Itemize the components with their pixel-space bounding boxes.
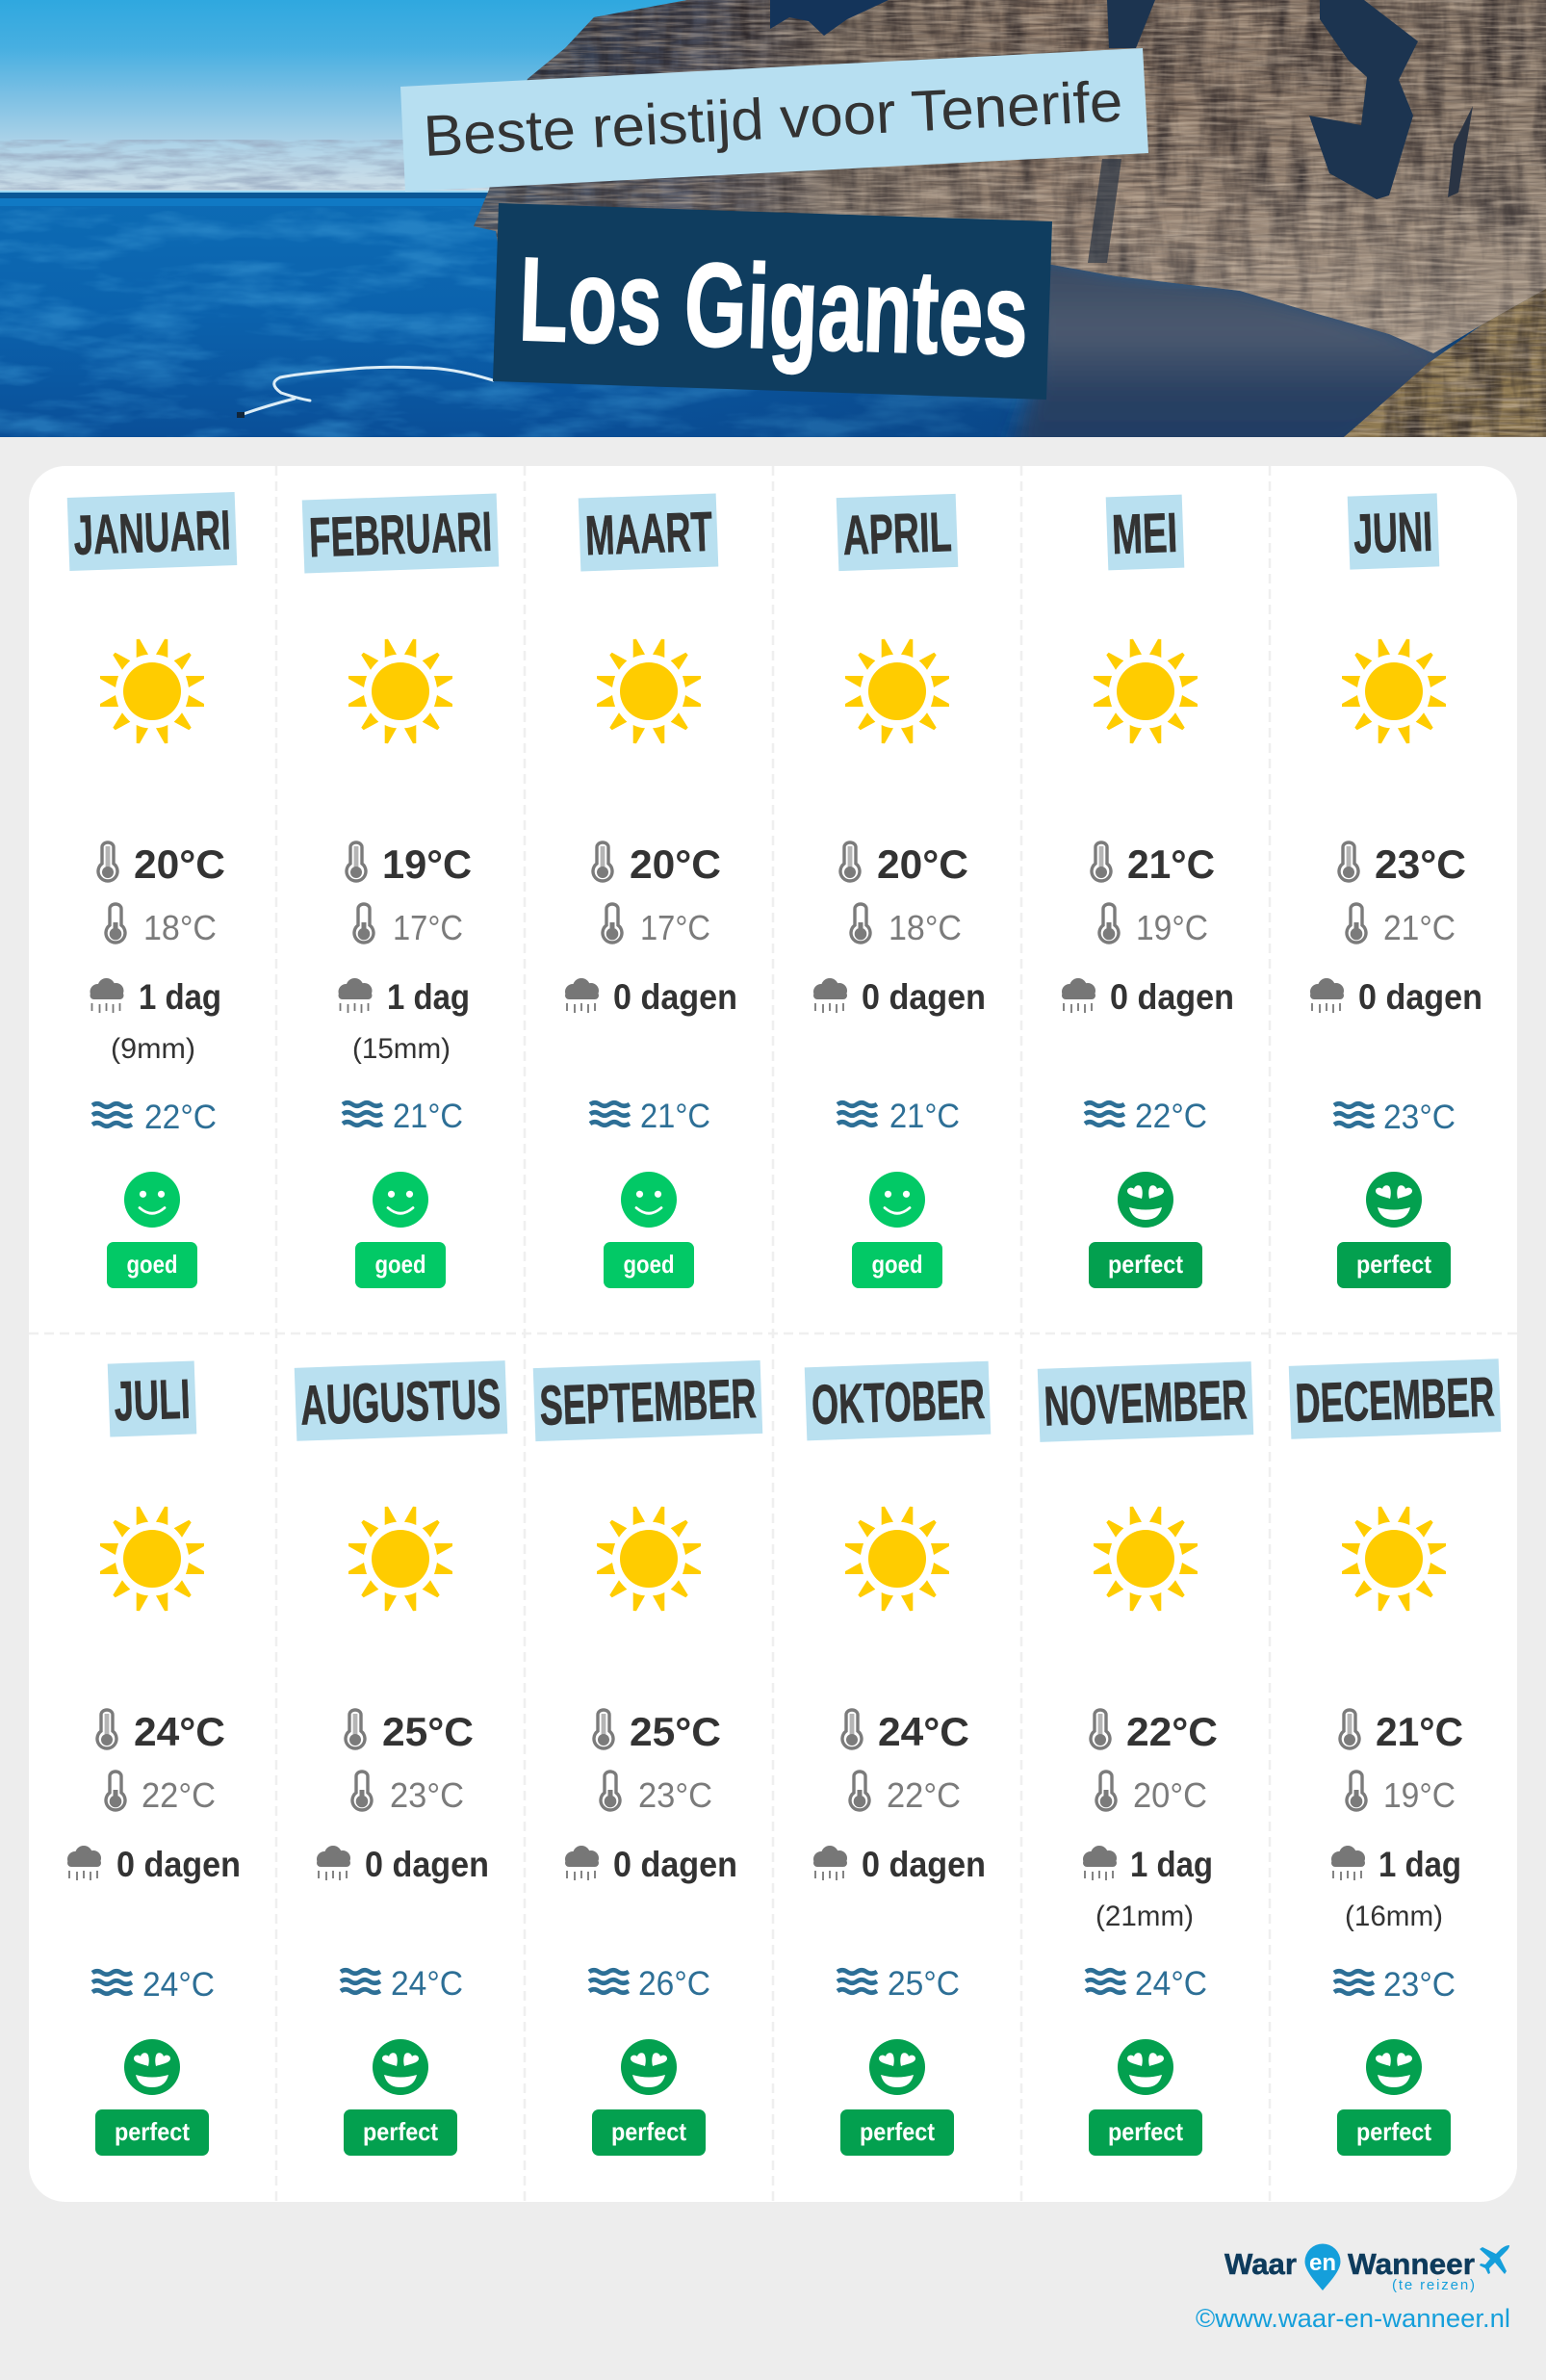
rating: perfect [1337, 2039, 1451, 2156]
month label [805, 1361, 991, 1440]
sea temperature [343, 1098, 463, 1135]
rain days [565, 1845, 737, 1884]
sea temperature: 23°C [1383, 1099, 1456, 1136]
month: januari [67, 492, 237, 1288]
min temperature [1347, 904, 1456, 947]
logo: Waar en Wanneer: Waar [1224, 2247, 1297, 2281]
min temperature: 22°C [887, 1775, 961, 1815]
min temperature [851, 904, 962, 947]
icon: location pin [1305, 2243, 1340, 2290]
max temperature: 23°C [1375, 841, 1466, 887]
title banner: Los Gigantes [493, 203, 1052, 400]
max temperature [1340, 1709, 1463, 1754]
month label [533, 1360, 762, 1441]
rain days: 1 dag [1379, 1845, 1461, 1884]
rain days [1310, 977, 1482, 1017]
rain days: 0 dagen [1358, 977, 1482, 1017]
icon: sun [100, 1507, 204, 1611]
rating: perfect [344, 2039, 457, 2156]
month: september [533, 1360, 762, 2156]
max temperature: 20°C [877, 841, 968, 887]
month label: JUNI [1353, 501, 1433, 565]
min temperature: 21°C [1383, 908, 1456, 947]
sea temperature: 25°C [888, 1965, 960, 2003]
max temperature: 20°C [630, 841, 721, 887]
title banner: Beste reistijd voor Tenerife [400, 48, 1148, 192]
min temperature: 19°C [1383, 1775, 1456, 1815]
rain days [67, 1845, 241, 1884]
month label: JULI [113, 1368, 192, 1433]
sea temperature [92, 1966, 215, 2004]
icon: sun [597, 1507, 701, 1611]
month label: FEBRUARI [308, 501, 493, 569]
copyright url: ©www.waar-en-wanneer.nl [1196, 2304, 1510, 2333]
max temperature: 20°C [134, 841, 225, 887]
month: december [1289, 1358, 1501, 2156]
rain days [90, 977, 221, 1065]
rain days [1062, 977, 1234, 1017]
rain days: 0 dagen [613, 1845, 737, 1884]
icon: airplane [1480, 2245, 1509, 2274]
min temperature [106, 904, 217, 947]
rain days: 1 dag [387, 977, 470, 1017]
icon: sun [100, 639, 204, 743]
rating: perfect: perfect [1108, 2117, 1183, 2146]
sea temperature: 24°C [391, 1965, 463, 2003]
sea temperature [1334, 1099, 1456, 1136]
panel: climate table card [29, 466, 1517, 2202]
sea temperature [1086, 1965, 1207, 2003]
min temperature [1347, 1772, 1456, 1815]
sea temperature [837, 1965, 960, 2003]
sea temperature: 21°C [393, 1098, 463, 1135]
min temperature: 17°C [640, 908, 710, 947]
rating: goed [107, 1172, 197, 1288]
month label: MAART [584, 501, 713, 567]
rain days: 0 dagen [862, 977, 986, 1017]
rain days [813, 977, 986, 1017]
rain days: 0 dagen [1110, 977, 1234, 1017]
sea temperature [341, 1965, 463, 2003]
max temperature: 24°C [134, 1709, 225, 1754]
rain days [1331, 1845, 1461, 1932]
min temperature: 18°C [889, 908, 962, 947]
rating: perfect [1089, 1172, 1202, 1288]
logo: Waar en Wanneer [1224, 2243, 1509, 2293]
sea temperature [1334, 1966, 1456, 2004]
month: juli [67, 1360, 241, 2156]
rating: goed: goed [127, 1250, 177, 1279]
rating: goed [604, 1172, 694, 1288]
max temperature: 24°C [878, 1709, 969, 1754]
rating: perfect [840, 2039, 954, 2156]
min temperature: 18°C [143, 908, 217, 947]
sea temperature: 24°C [1135, 1965, 1207, 2003]
min temperature: 17°C [393, 908, 463, 947]
header photo: cliffs of Los Gigantes and the sea [0, 0, 1546, 453]
month: juni [1310, 493, 1482, 1288]
icon: sun [348, 639, 452, 743]
max temperature: 22°C [1126, 1709, 1218, 1754]
sea temperature: 26°C [638, 1965, 710, 2003]
sea temperature [92, 1099, 217, 1136]
max temperature [1092, 841, 1215, 887]
rating: perfect: perfect [115, 2117, 190, 2146]
max temperature: 25°C [382, 1709, 474, 1754]
month: april [813, 494, 986, 1288]
rain days [339, 977, 470, 1065]
sea temperature: 22°C [1135, 1098, 1207, 1135]
rain days [1083, 1845, 1213, 1932]
min temperature [106, 1772, 216, 1815]
month: augustus [295, 1360, 507, 2156]
logo: Waar en Wanneer: (te reizen) [1392, 2277, 1475, 2293]
icon: sun [597, 639, 701, 743]
max temperature: 25°C [630, 1709, 721, 1754]
rain days: 1 dag [1130, 1845, 1213, 1884]
icon: sun [1342, 1507, 1446, 1611]
month label: AUGUSTUS [299, 1367, 502, 1437]
rain days [565, 977, 737, 1017]
sea temperature: 23°C [1383, 1966, 1456, 2004]
max temperature: 21°C [1376, 1709, 1463, 1754]
month label: MEI [1111, 502, 1178, 566]
rating: goed: goed [624, 1250, 674, 1279]
icon: sun [348, 1507, 452, 1611]
rating: goed: goed [872, 1250, 922, 1279]
rating: perfect: perfect [1108, 1250, 1183, 1279]
month: oktober [805, 1361, 991, 2156]
month label: OKTOBER [811, 1368, 986, 1436]
min temperature [850, 1772, 961, 1815]
rating: perfect [592, 2039, 706, 2156]
rain days [317, 1845, 489, 1884]
min temperature [1099, 904, 1208, 947]
rain days: (21mm) [1095, 1901, 1194, 1932]
min temperature: 22°C [142, 1775, 216, 1815]
sea temperature: 21°C [640, 1098, 710, 1135]
min temperature: 19°C [1136, 908, 1208, 947]
month label [67, 492, 237, 571]
rating: perfect: perfect [611, 2117, 686, 2146]
sea temperature [837, 1098, 960, 1135]
month label [1106, 495, 1184, 570]
rain days: 0 dagen [365, 1845, 489, 1884]
min temperature: 23°C [638, 1775, 712, 1815]
month label: APRIL [841, 501, 953, 567]
month: mei [1062, 495, 1234, 1288]
month label: NOVEMBER [1043, 1368, 1249, 1438]
icon: sun [1342, 639, 1446, 743]
rain days: (9mm) [111, 1033, 195, 1065]
sea temperature [1085, 1098, 1207, 1135]
icon: location pin: en [1309, 2250, 1336, 2276]
rating: perfect: perfect [1356, 1250, 1431, 1279]
month label [108, 1360, 196, 1437]
rating: perfect [95, 2039, 209, 2156]
sea temperature [590, 1098, 710, 1135]
rating: perfect [1089, 2039, 1202, 2156]
month label: SEPTEMBER [538, 1367, 758, 1437]
min temperature [603, 904, 710, 947]
sea temperature: 22°C [144, 1099, 217, 1136]
month label [837, 494, 958, 571]
max temperature: 21°C [1127, 841, 1215, 887]
month label [295, 1360, 507, 1441]
logo: Waar en Wanneer: Wanneer [1348, 2247, 1475, 2281]
title banner: Los Gigantes: Los Gigantes [517, 233, 1030, 382]
max temperature: 19°C [382, 841, 472, 887]
icon: sun [1094, 639, 1198, 743]
rain days: 1 dag [139, 977, 221, 1017]
min temperature: 20°C [1133, 1775, 1207, 1815]
month: maart [565, 494, 737, 1288]
month: februari [302, 493, 499, 1288]
month label [1348, 493, 1439, 570]
rating: perfect: perfect [363, 2117, 438, 2146]
month label: JANUARI [72, 499, 232, 567]
rating: perfect: perfect [1356, 2117, 1431, 2146]
rating: goed [355, 1172, 446, 1288]
min temperature [352, 1772, 464, 1815]
min temperature [1096, 1772, 1207, 1815]
min temperature: 23°C [390, 1775, 464, 1815]
rain days: 0 dagen [116, 1845, 241, 1884]
rain days: (16mm) [1345, 1901, 1443, 1932]
rating: goed [852, 1172, 942, 1288]
rain days: 0 dagen [862, 1845, 986, 1884]
min temperature [601, 1772, 712, 1815]
rating: perfect: perfect [860, 2117, 935, 2146]
min temperature [354, 904, 463, 947]
sea temperature: 21°C [889, 1098, 960, 1135]
icon: sun [1094, 1507, 1198, 1611]
month label [1038, 1361, 1253, 1442]
rain days: (15mm) [352, 1033, 451, 1065]
icon: sun [845, 1507, 949, 1611]
sea temperature [589, 1965, 710, 2003]
sea temperature: 24°C [142, 1966, 215, 2004]
rating: goed: goed [375, 1250, 425, 1279]
title banner: Beste reistijd voor Tenerife: Beste reistijd voor Tenerife [422, 68, 1124, 168]
rating: perfect [1337, 1172, 1451, 1288]
month label [579, 494, 718, 571]
month: november [1038, 1361, 1253, 2156]
month label [302, 493, 499, 574]
icon: sun [845, 639, 949, 743]
rain days [813, 1845, 986, 1884]
rain days: 0 dagen [613, 977, 737, 1017]
